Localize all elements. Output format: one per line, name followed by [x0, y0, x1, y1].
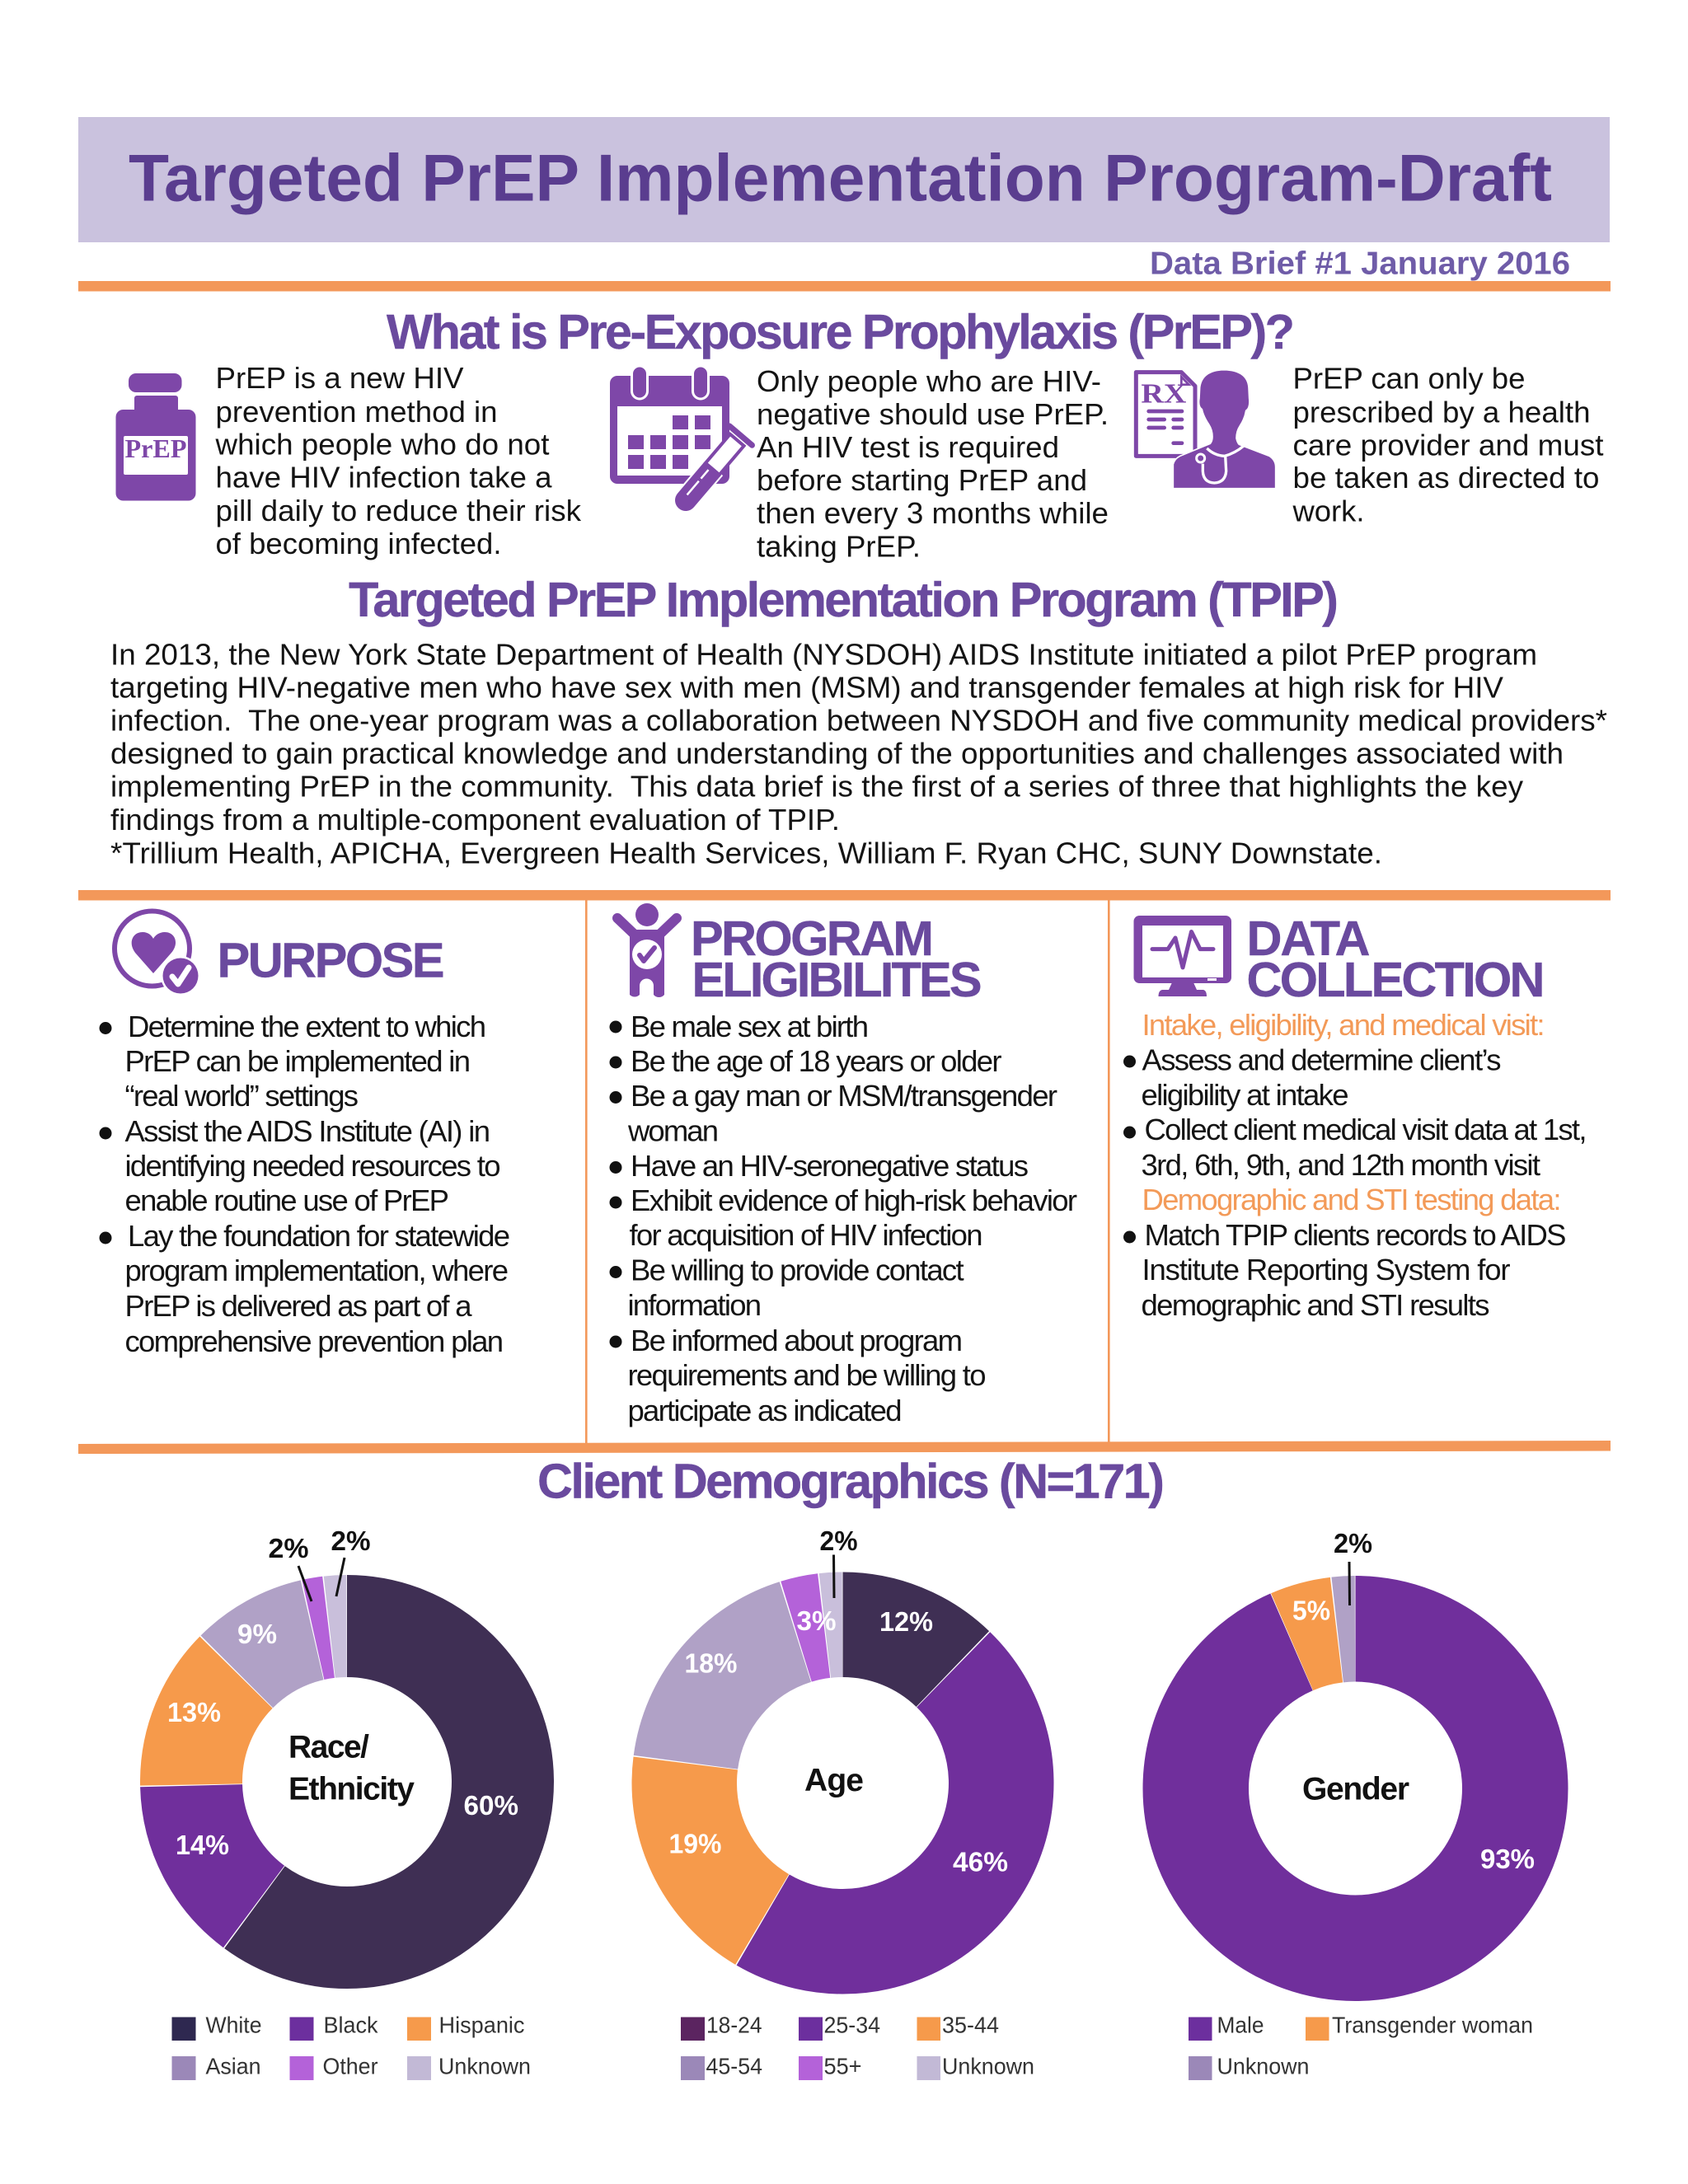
eligibility list: for acquisition of HIV infection — [630, 1218, 982, 1252]
icon: PrEP pill bottle: PrEP — [125, 434, 186, 463]
text: TPIP description: infection. The one-year program was a collaboration between NYSDOH and five community medical providers* — [110, 704, 1607, 738]
eligibility list: requirements and be willing to — [628, 1358, 986, 1392]
text: prescribed by provider: be taken as directed to — [1292, 461, 1599, 494]
purpose list: Assist the AIDS Institute (AI) in — [125, 1114, 490, 1148]
text: HIV-negative requirement — [757, 364, 1109, 564]
data collection list: Institute Reporting System for — [1142, 1253, 1510, 1286]
chart: race/ethnicity donut: 9% — [237, 1619, 277, 1649]
text: PrEP definition: have HIV infection take a — [216, 460, 552, 494]
data collection list: Intake, eligibility, and medical visit: — [1142, 1008, 1545, 1042]
legend: age: 18-24 — [706, 2013, 762, 2037]
eligibility heading: ELIGIBILITES — [692, 952, 982, 1007]
data collection list — [1123, 1008, 1587, 1322]
panel: data collection — [1123, 911, 1587, 1322]
data collection list: Collect client medical visit data at 1st, — [1144, 1113, 1587, 1146]
purpose list: PrEP is delivered as part of a — [125, 1289, 472, 1323]
icon: doctor with prescription — [1136, 370, 1276, 489]
eligibility list: Exhibit evidence of high-risk behavior — [631, 1183, 1077, 1217]
data brief date: Data Brief #1 January 2016 — [1150, 246, 1570, 282]
purpose list: “real world” settings — [125, 1079, 359, 1113]
chart: age donut: 2% — [819, 1526, 857, 1556]
text: PrEP definition — [214, 361, 582, 560]
text: prescribed by provider: care provider and must — [1292, 429, 1604, 462]
text: prescribed by provider: PrEP can only be — [1292, 361, 1525, 396]
heading: client demographics: Client Demographics (N=171) — [537, 1454, 1165, 1508]
text: prescribed by provider: prescribed by a health — [1292, 396, 1591, 429]
chart: age donut — [669, 1526, 1008, 1942]
chart: gender donut — [1196, 1528, 1535, 1948]
purpose heading: PURPOSE — [218, 933, 445, 987]
legend: age: Unknown — [942, 2054, 1034, 2079]
chart: gender donut: 2% — [1334, 1528, 1372, 1558]
eligibility list: Be the age of 18 years or older — [631, 1044, 1002, 1078]
purpose list: Determine the extent to which — [128, 1010, 486, 1043]
chart: age donut: 18% — [684, 1648, 737, 1678]
purpose list: enable routine use of PrEP — [125, 1183, 449, 1217]
legend: gender — [1189, 2013, 1533, 2080]
text: TPIP description — [110, 638, 1607, 870]
text: PrEP definition: pill daily to reduce their risk — [216, 494, 582, 527]
legend: age: 45-54 — [706, 2054, 762, 2079]
chart: race/ethnicity donut: 2% — [269, 1533, 308, 1563]
title banner — [78, 117, 1610, 242]
chart: race/ethnicity donut — [167, 1526, 518, 1938]
text: prescribed by provider — [1292, 361, 1604, 527]
eligibility heading — [691, 911, 982, 1007]
purpose list: comprehensive prevention plan — [125, 1324, 504, 1358]
eligibility list: Be willing to provide contact — [631, 1253, 964, 1287]
legend: race/ethnicity: Other — [323, 2054, 377, 2079]
data collection list: 3rd, 6th, 9th, and 12th month visit — [1141, 1148, 1540, 1182]
eligibility list: woman — [627, 1114, 719, 1147]
chart: gender donut: 5% — [1292, 1596, 1330, 1625]
text: PrEP definition: which people who do not — [214, 427, 549, 462]
legend: gender: Male — [1217, 2013, 1264, 2037]
purpose list — [99, 1010, 510, 1358]
eligibility list: Be informed about program — [631, 1324, 963, 1357]
icon: heart-rate monitor — [1134, 916, 1231, 996]
chart: race/ethnicity donut: 14% — [176, 1830, 229, 1860]
text: HIV-negative requirement: then every 3 months while — [757, 496, 1109, 530]
chart: age donut: Age — [804, 1763, 864, 1798]
data collection list: demographic and STI results — [1141, 1288, 1490, 1322]
chart: age donut: 19% — [669, 1828, 722, 1859]
icon: calendar and test tube — [610, 366, 752, 519]
data collection heading: DATA — [1246, 911, 1370, 966]
eligibility list: Be a gay man or MSM/transgender — [631, 1079, 1057, 1113]
panel: purpose — [99, 912, 510, 1358]
chart: gender donut: 93% — [1480, 1844, 1535, 1874]
data collection heading: COLLECTION — [1246, 952, 1545, 1007]
icon: doctor with prescription: RX — [1141, 379, 1186, 410]
chart: race/ethnicity donut: 60% — [463, 1790, 518, 1821]
text: HIV-negative requirement: before starting PrEP and — [757, 463, 1087, 497]
legend: age: 25-34 — [824, 2013, 880, 2037]
text: PrEP definition: of becoming infected. — [216, 527, 501, 560]
data collection list: Assess and determine client’s — [1142, 1043, 1502, 1076]
legend: race/ethnicity: Black — [323, 2013, 378, 2037]
purpose list: program implementation, where — [125, 1254, 509, 1287]
icon: heart with check — [115, 912, 200, 996]
text: TPIP description: designed to gain practical knowledge and understanding of the opportunities and challenges associated with — [110, 737, 1564, 771]
purpose list: identifying needed resources to — [125, 1149, 501, 1183]
legend: age — [681, 2013, 1034, 2080]
data collection list: Match TPIP clients records to AIDS — [1144, 1218, 1566, 1252]
text: HIV-negative requirement: Only people who are HIV- — [757, 364, 1101, 398]
chart: gender donut: Gender — [1302, 1772, 1409, 1807]
icon: person with check — [617, 903, 677, 997]
text: HIV-negative requirement: An HIV test is required — [757, 430, 1059, 464]
legend: race/ethnicity: Hispanic — [438, 2013, 524, 2037]
chart: race/ethnicity donut: Race/ — [288, 1729, 369, 1765]
eligibility heading: PROGRAM — [691, 911, 934, 966]
chart: age donut: 3% — [796, 1605, 836, 1636]
icon: PrEP pill bottle — [115, 373, 196, 501]
legend: age: 55+ — [824, 2054, 862, 2079]
legend: race/ethnicity: White — [206, 2013, 262, 2037]
eligibility list: participate as indicated — [628, 1394, 902, 1427]
eligibility list: Have an HIV-seronegative status — [631, 1149, 1029, 1183]
chart: race/ethnicity donut: Ethnicity — [288, 1772, 415, 1807]
legend: race/ethnicity — [171, 2013, 531, 2080]
data collection list: eligibility at intake — [1141, 1078, 1348, 1112]
text: TPIP description: targeting HIV-negative men who have sex with men (MSM) and transgender females at high risk for HIV — [110, 671, 1504, 705]
legend: race/ethnicity: Unknown — [438, 2054, 531, 2079]
heading: what is PrEP: What is Pre-Exposure Prophylaxis (PrEP)? — [387, 304, 1295, 359]
eligibility list: Be male sex at birth — [631, 1010, 869, 1043]
chart: age donut: 12% — [879, 1606, 933, 1637]
text: prescribed by provider: work. — [1292, 494, 1365, 527]
panel: program eligibilities — [610, 903, 1077, 1427]
chart: race/ethnicity donut: 13% — [167, 1697, 221, 1727]
legend: gender: Unknown — [1217, 2054, 1309, 2079]
text: TPIP description: In 2013, the New York State Department of Health (NYSDOH) AIDS Institute initiated a pilot PrEP program — [110, 638, 1537, 672]
chart: age donut: 46% — [953, 1846, 1008, 1877]
text: PrEP definition: PrEP is a new HIV — [216, 361, 464, 395]
eligibility list: information — [628, 1288, 762, 1322]
legend: age: 35-44 — [942, 2013, 999, 2037]
text: HIV-negative requirement: taking PrEP. — [757, 529, 921, 564]
purpose list: PrEP can be implemented in — [125, 1044, 471, 1078]
legend: race/ethnicity: Asian — [206, 2054, 260, 2079]
text: TPIP description: *Trillium Health, APICHA, Evergreen Health Services, William F. Ryan CHC, SUNY Downstate. — [110, 836, 1382, 870]
purpose list: Lay the foundation for statewide — [128, 1219, 510, 1253]
heading: TPIP: Targeted PrEP Implementation Program (TPIP) — [349, 572, 1339, 627]
text: TPIP description: implementing PrEP in the community. This data brief is the first of a series of three that highlights the key — [110, 770, 1524, 804]
data collection list: Demographic and STI testing data: — [1142, 1183, 1561, 1216]
chart: race/ethnicity donut: 2% — [331, 1526, 371, 1556]
text: TPIP description: findings from a multiple-component evaluation of TPIP. — [110, 803, 840, 837]
data collection heading — [1246, 911, 1545, 1007]
eligibility list — [610, 1010, 1077, 1427]
text: PrEP definition: prevention method in — [216, 395, 498, 429]
legend: gender: Transgender woman — [1332, 2013, 1533, 2037]
title banner: Targeted PrEP Implementation Program-Draft — [129, 142, 1552, 216]
text: HIV-negative requirement: negative should use PrEP. — [757, 397, 1109, 431]
